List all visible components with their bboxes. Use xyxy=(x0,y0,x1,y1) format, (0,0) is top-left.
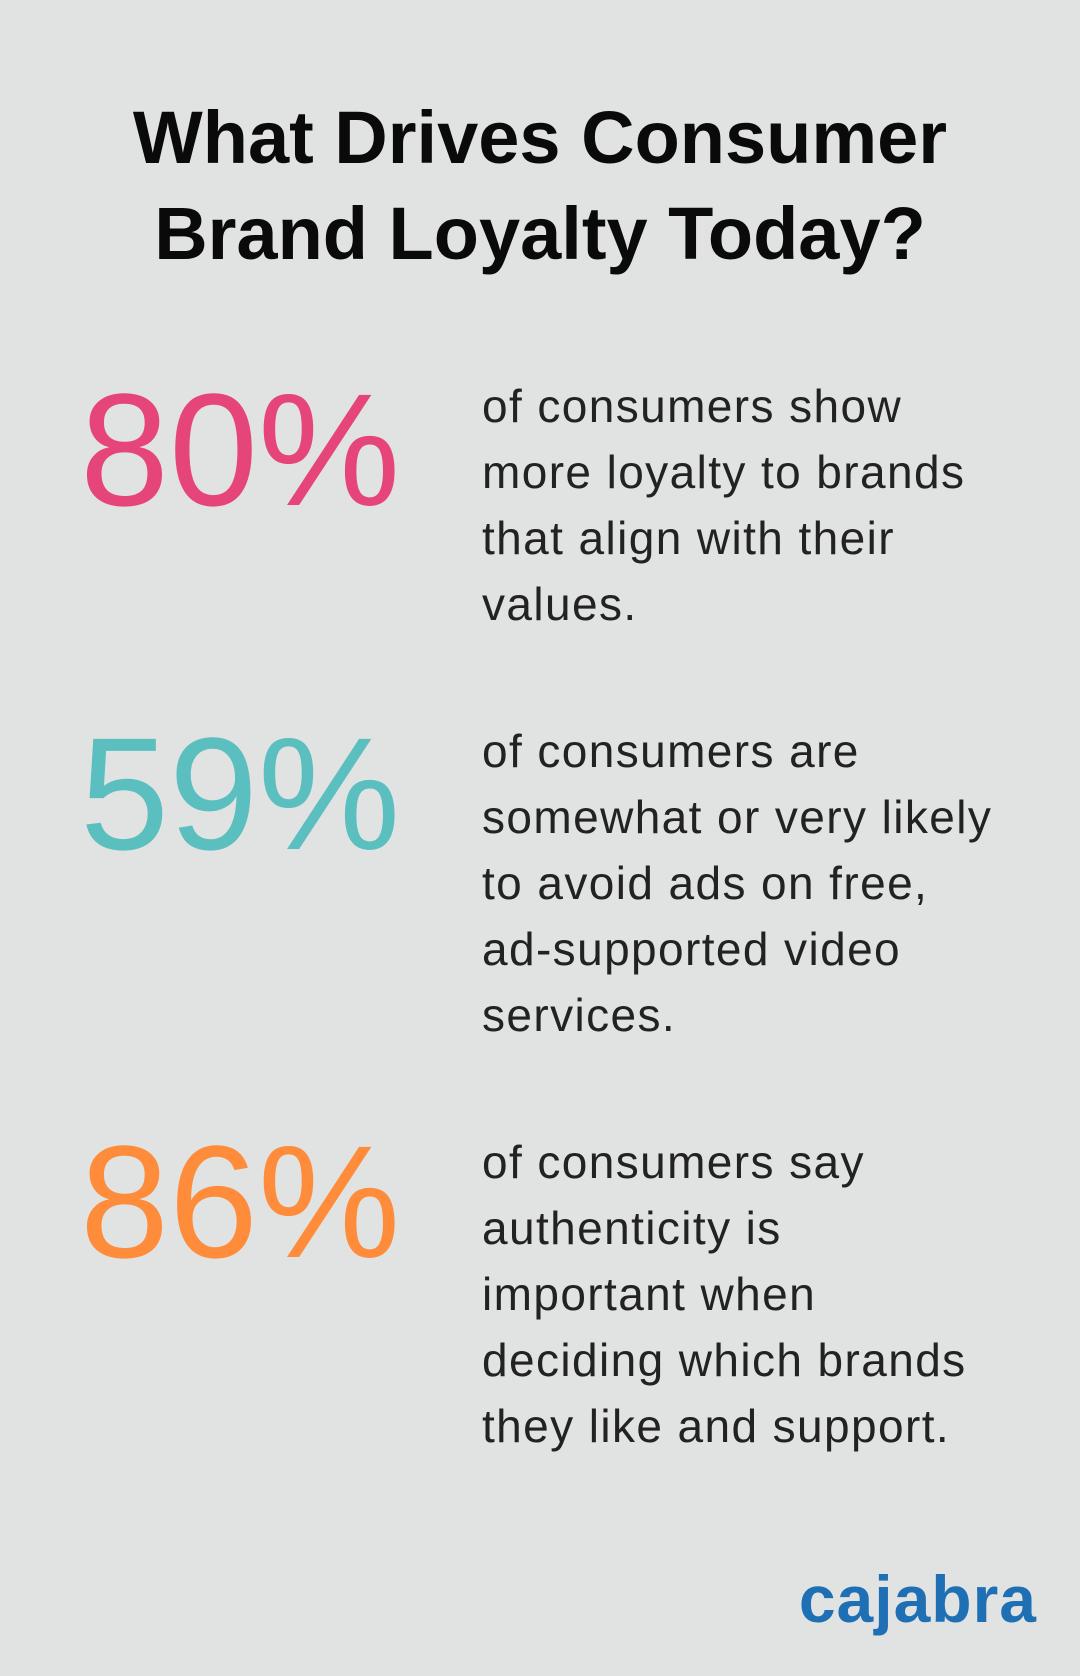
title: Brand Loyalty Today? xyxy=(154,192,926,275)
text: 80% description: values. xyxy=(482,578,638,630)
logo: cajabra xyxy=(799,1562,1037,1636)
text: 80% description: of consumers show xyxy=(482,380,902,432)
text: 86% description: of consumers say xyxy=(482,1136,865,1188)
text: 59% description xyxy=(482,725,992,1041)
title: What Drives Consumer xyxy=(133,96,947,179)
text: 86% description: important when xyxy=(482,1268,816,1320)
text: 80% description: more loyalty to brands xyxy=(482,446,965,498)
text: 59% description: of consumers are xyxy=(482,725,860,777)
stat: 86%: 86% xyxy=(80,1112,400,1291)
text: 86% description: they like and support. xyxy=(482,1400,950,1452)
text: 86% description: authenticity is xyxy=(482,1202,782,1254)
text: 59% description: services. xyxy=(482,989,676,1041)
text: 86% description: deciding which brands xyxy=(482,1334,967,1386)
text: 86% description xyxy=(482,1136,967,1452)
text: 59% description: somewhat or very likely xyxy=(482,791,992,843)
stat: 59%: 59% xyxy=(80,704,400,883)
text: 80% description: that align with their xyxy=(482,512,895,564)
stat: 80%: 80% xyxy=(80,360,400,539)
title xyxy=(133,96,947,275)
text: 59% description: to avoid ads on free, xyxy=(482,857,928,909)
text: 59% description: ad-supported video xyxy=(482,923,901,975)
text: 80% description xyxy=(482,380,965,630)
